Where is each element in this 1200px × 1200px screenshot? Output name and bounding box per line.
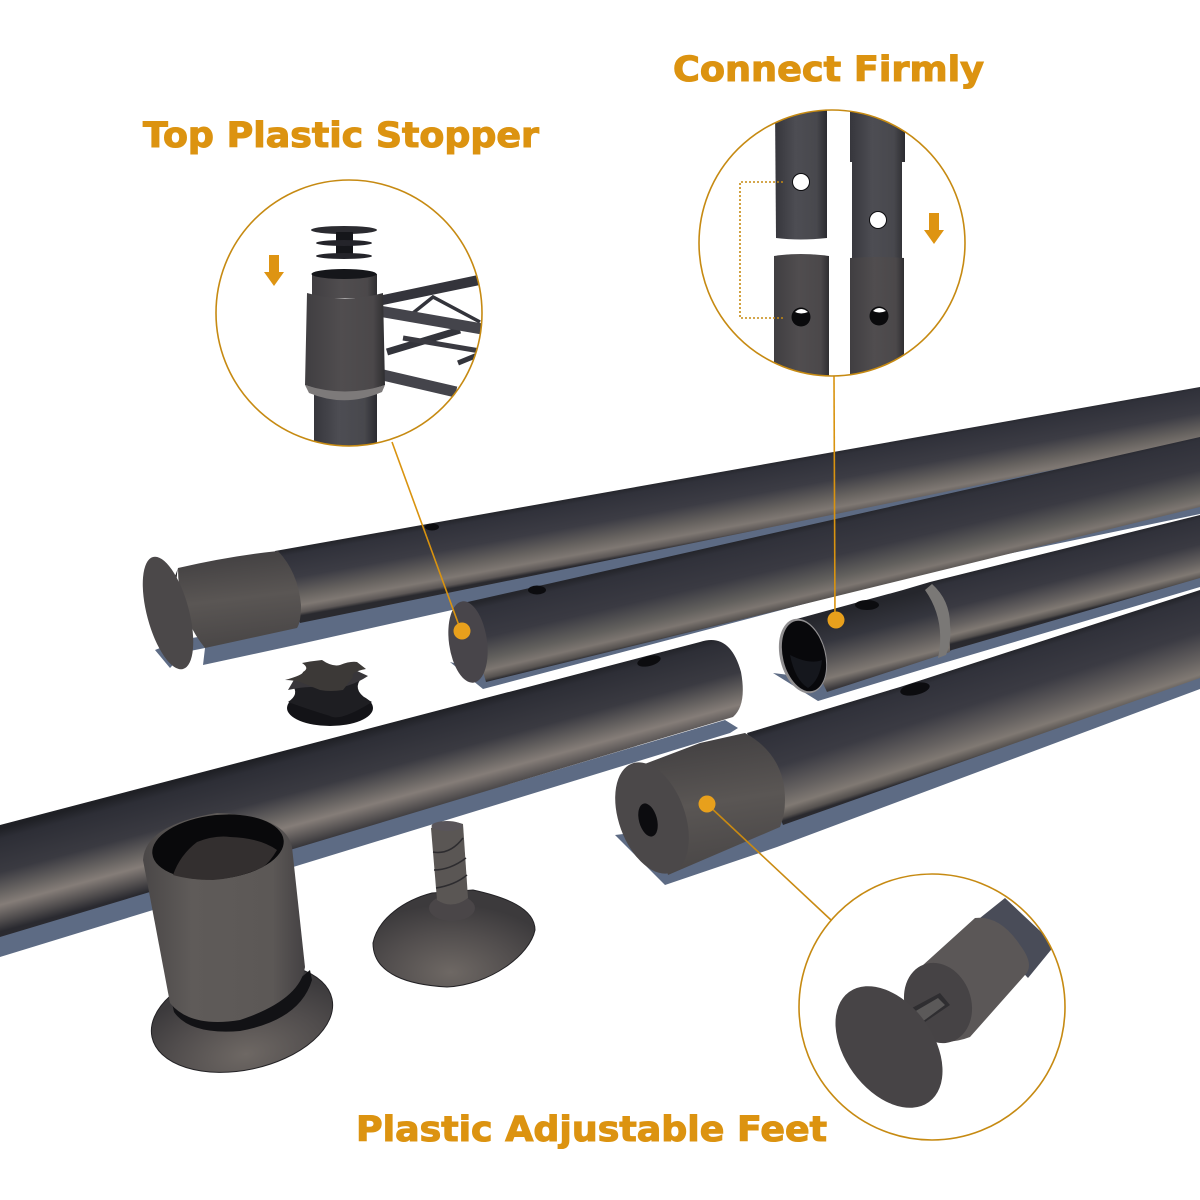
dot: stopper marker <box>454 622 470 640</box>
pole: third tube with swaged end <box>771 515 1200 701</box>
callout: connect firmly detail <box>699 105 965 380</box>
pole: second tube <box>443 437 1200 689</box>
part: leveling foot with screw <box>373 821 535 987</box>
leader line: stopper <box>392 442 461 631</box>
pole: front long tube <box>0 640 743 957</box>
heading: Connect Firmly: Connect Firmly <box>673 50 984 90</box>
heading: Plastic Adjustable Feet: Plastic Adjustable Feet <box>356 1110 827 1150</box>
callout: adjustable feet detail <box>799 874 1065 1140</box>
dot: feet marker <box>698 796 716 812</box>
pole: top rear tube with cap <box>133 387 1200 674</box>
leader line: feet <box>707 804 831 920</box>
pole: fourth tube with foot sleeve <box>601 590 1200 885</box>
icon: down arrow <box>264 255 284 286</box>
dot: connector marker <box>828 612 844 628</box>
callout: top plastic stopper detail <box>216 180 482 446</box>
heading: Top Plastic Stopper: Top Plastic Stopper <box>143 116 540 156</box>
leader line: connector <box>834 376 835 620</box>
part: plastic stopper <box>285 660 373 726</box>
part: base cup <box>141 808 343 1088</box>
icon: down arrow <box>924 213 944 244</box>
